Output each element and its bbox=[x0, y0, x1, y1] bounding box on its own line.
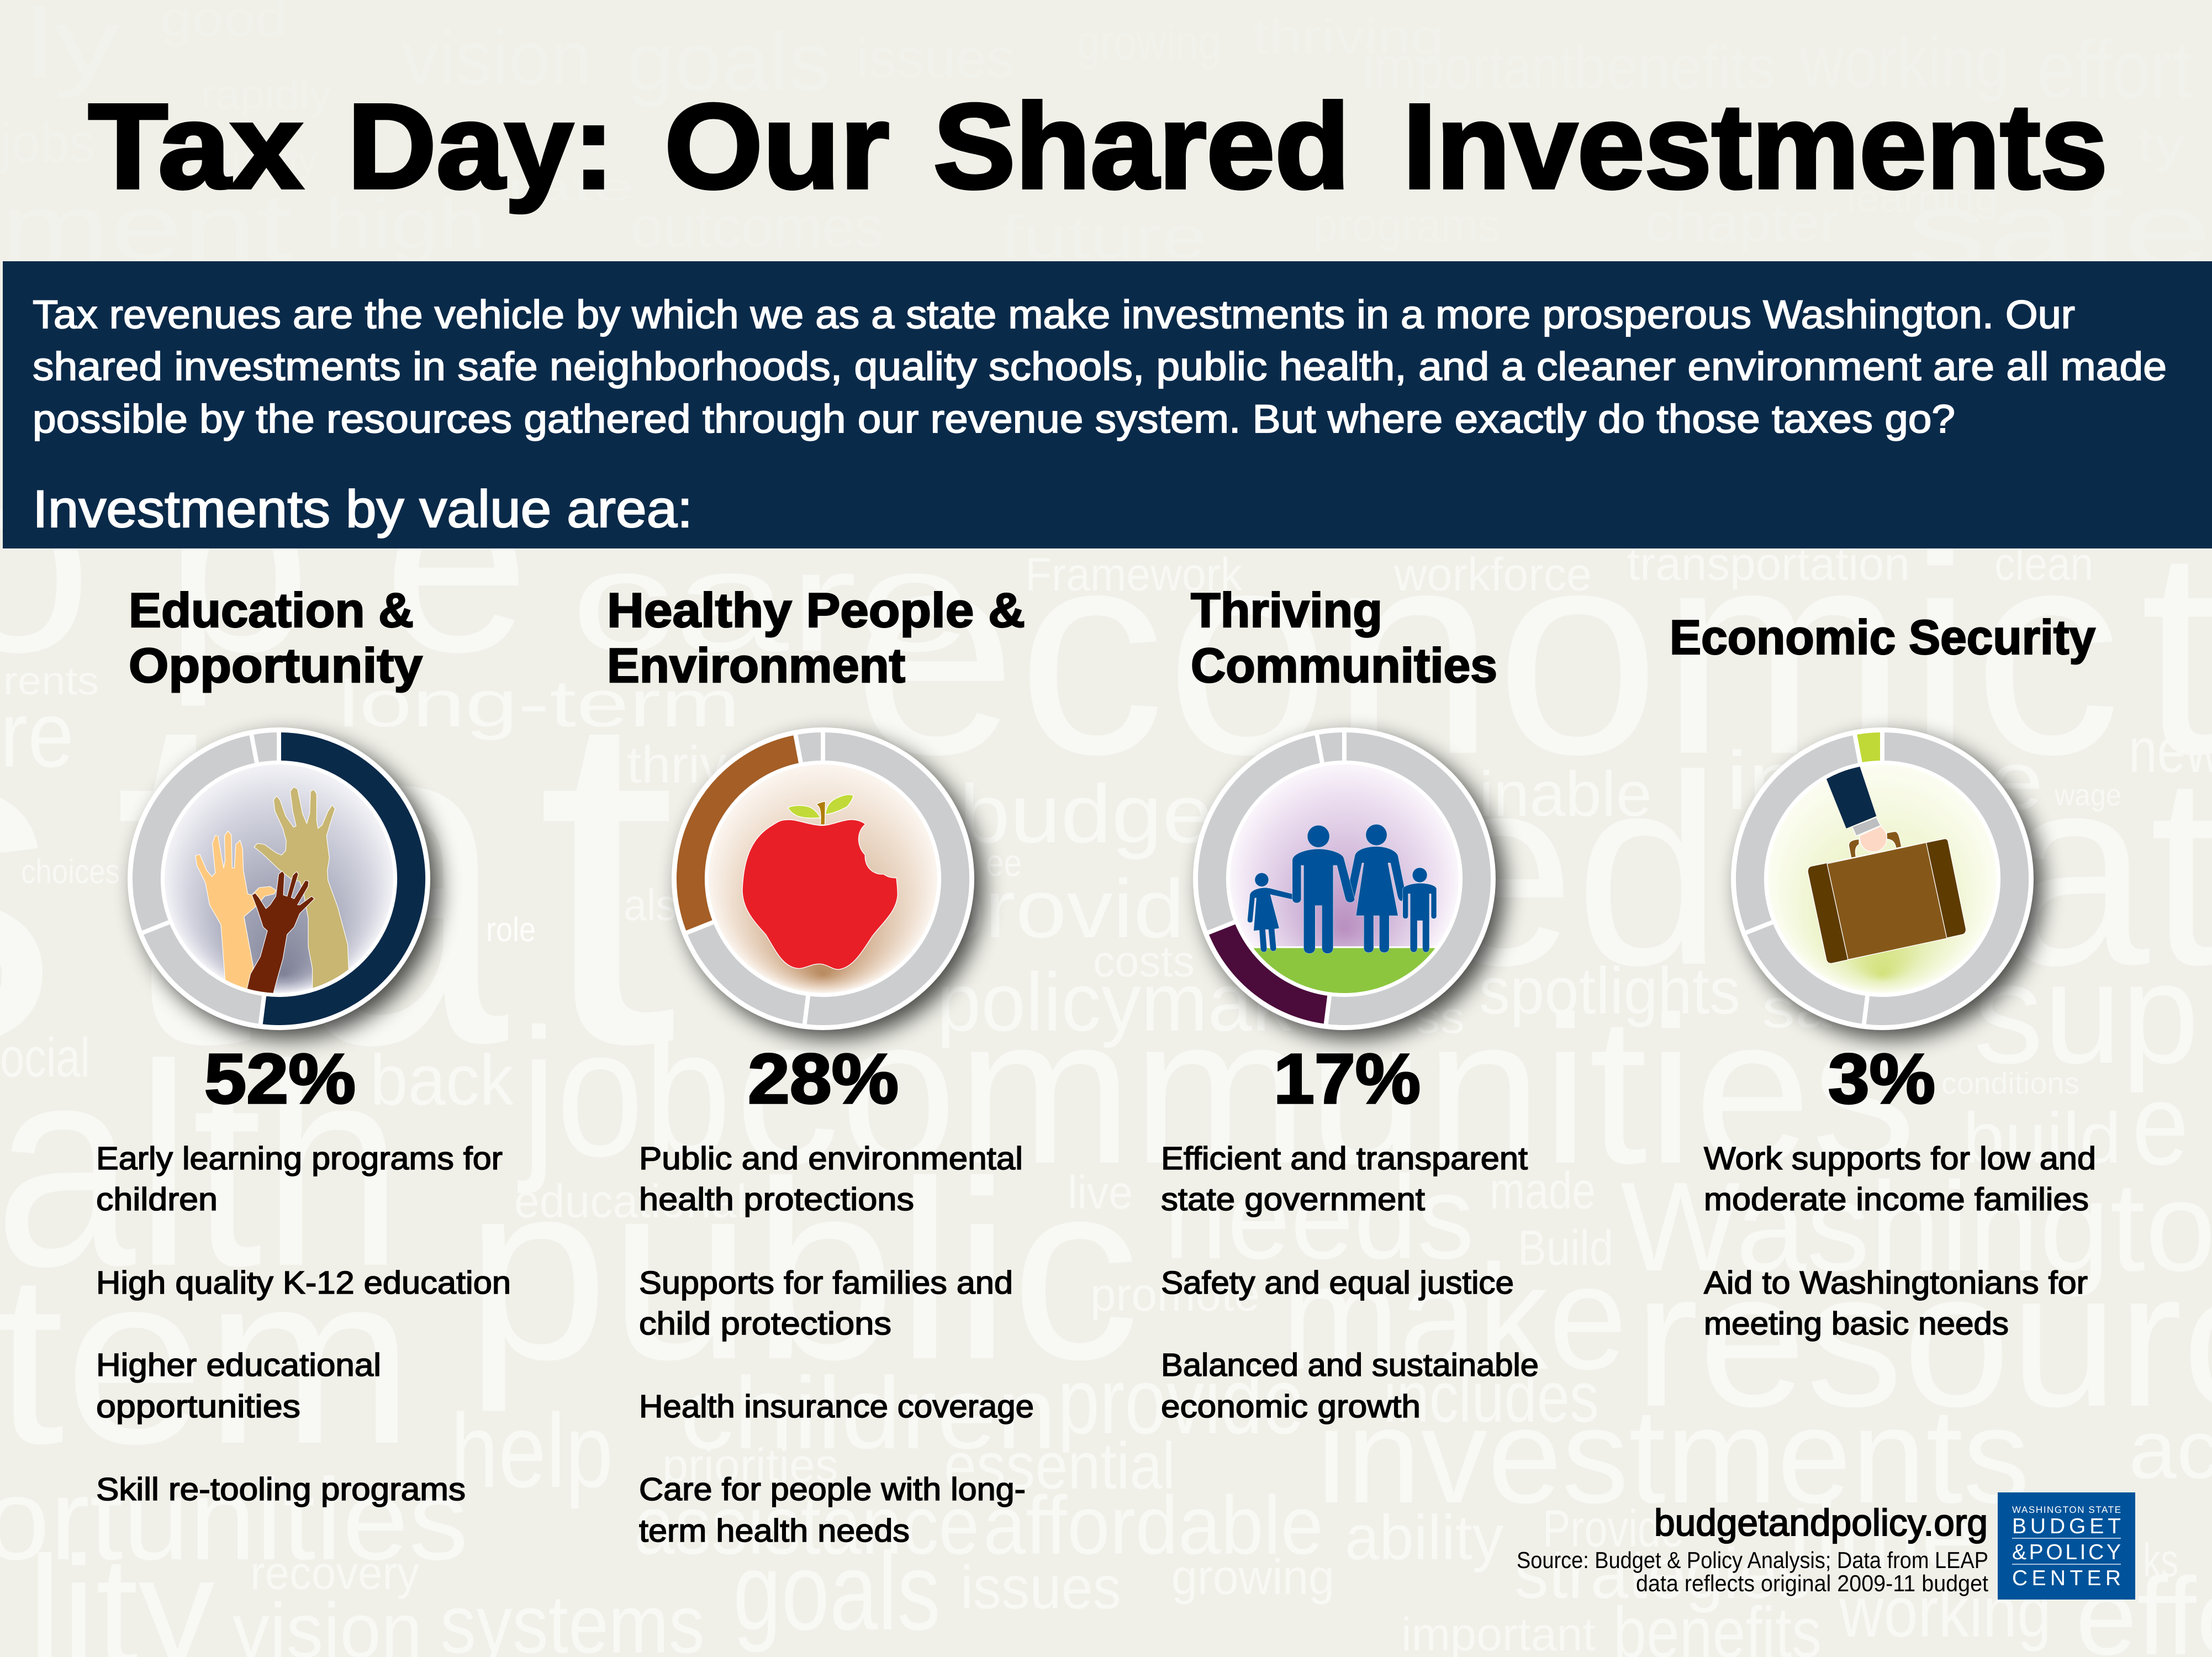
background word cloud lower: ability bbox=[1345, 1502, 1503, 1573]
heading: Economic Security bbox=[1670, 610, 2095, 664]
bullet list: High quality K-12 education bbox=[96, 1265, 511, 1301]
logo: Washington State Budget and Policy Center: &POLICY bbox=[2012, 1540, 2121, 1564]
background word cloud lower: provid bbox=[933, 862, 1185, 955]
background word cloud top: ty bbox=[2137, 118, 2185, 173]
background word cloud lower: t bbox=[113, 612, 256, 1143]
background word cloud lower: spotlights bbox=[1479, 954, 1740, 1028]
title: Tax bbox=[88, 80, 303, 214]
donut: 17 percent with family icon bbox=[1193, 727, 1504, 1039]
bullet list: Health insurance coverage bbox=[639, 1389, 1034, 1424]
background word cloud top: working bbox=[1799, 22, 2009, 102]
background word cloud lower: policymake bbox=[937, 956, 1337, 1048]
intro paragraph: shared investments in safe neighborhoods, quality schools, public health, and a cleaner environment are all made bbox=[33, 345, 2167, 389]
background word cloud lower: tem bbox=[0, 1223, 414, 1495]
background word cloud lower: issues bbox=[960, 1554, 1121, 1622]
icon: apple bbox=[742, 795, 898, 969]
logo: Washington State Budget and Policy Center: CENTER bbox=[2012, 1566, 2121, 1590]
panel: healthy people and environment bbox=[607, 583, 1034, 1549]
bullet list: Early learning programs for bbox=[96, 1141, 503, 1176]
background word cloud lower: educational bbox=[514, 1175, 747, 1228]
bullet list: Supports for families and bbox=[639, 1265, 1013, 1301]
bullet list: Safety and equal justice bbox=[1161, 1265, 1514, 1301]
background word cloud lower: priorities bbox=[662, 1439, 838, 1492]
background word cloud lower: inable bbox=[1479, 759, 1652, 830]
background word cloud top: future bbox=[1000, 203, 1207, 271]
background word cloud top: high bbox=[324, 183, 486, 264]
background word cloud lower: made bbox=[1490, 1162, 1596, 1220]
source note: data reflects original 2009-11 budget bbox=[1636, 1570, 1988, 1596]
donut: 28 percent with apple icon bbox=[672, 727, 983, 1039]
heading bbox=[1191, 583, 1497, 693]
background word cloud lower: affordable bbox=[983, 1479, 1323, 1571]
background word cloud lower: budge bbox=[959, 767, 1213, 860]
percentage: 28% bbox=[748, 1039, 899, 1118]
background word cloud lower: Provide bbox=[1543, 1500, 1684, 1558]
intro banner bbox=[3, 261, 2212, 548]
bullet list: economic growth bbox=[1161, 1389, 1421, 1424]
background word cloud top: issues bbox=[856, 28, 1015, 89]
background word cloud lower: time bbox=[1787, 1484, 1977, 1589]
background word cloud lower: sa bbox=[1762, 978, 1832, 1039]
bullet list: health protections bbox=[639, 1181, 914, 1217]
panel: economic security bbox=[1670, 610, 2096, 1342]
background word cloud lower: recovery bbox=[250, 1547, 419, 1600]
background word cloud lower: communities bbox=[735, 973, 1917, 1207]
background word cloud lower: build bbox=[1963, 1097, 2121, 1178]
background word cloud lower: transportation bbox=[1627, 538, 1910, 590]
background word cloud top: rapidly bbox=[200, 71, 332, 118]
panel: education and opportunity bbox=[96, 583, 511, 1507]
background word cloud top: thriving bbox=[1253, 9, 1444, 65]
background word cloud lower: long-term bbox=[338, 667, 740, 741]
background word cloud lower: wage bbox=[2054, 778, 2121, 812]
background word cloud lower: includes bbox=[1384, 1357, 1599, 1437]
intro paragraph: Tax revenues are the vehicle by which we as a state make investments in a more prosperous Washington. Our bbox=[33, 293, 2075, 337]
background word cloud lower: ks bbox=[2143, 1534, 2178, 1587]
background word cloud top: jobs bbox=[0, 112, 95, 174]
background word cloud lower: role bbox=[486, 911, 536, 949]
bullet list bbox=[639, 1141, 1034, 1549]
background word cloud lower: growing bbox=[1171, 1550, 1334, 1605]
heading bbox=[607, 583, 1025, 693]
website link: budgetandpolicy.org bbox=[1654, 1502, 1988, 1544]
background word cloud top bbox=[0, 0, 2212, 288]
bullet list bbox=[96, 1141, 511, 1507]
bullet list: meeting basic needs bbox=[1704, 1306, 2009, 1342]
background word cloud lower: job bbox=[516, 990, 731, 1195]
title bbox=[88, 80, 2108, 214]
percentage: 52% bbox=[204, 1039, 356, 1118]
background word cloud lower: essential bbox=[944, 1429, 1175, 1503]
title: Day: bbox=[347, 80, 614, 214]
background word cloud top: important bbox=[1363, 34, 1574, 102]
heading: Environment bbox=[607, 638, 905, 693]
bullet list: Balanced and sustainable bbox=[1161, 1347, 1539, 1383]
background word cloud top: outcomes bbox=[631, 195, 884, 260]
background word cloud top: growing bbox=[1077, 15, 1221, 70]
background word cloud lower: investments bbox=[1317, 1380, 2030, 1531]
bullet list: children bbox=[96, 1181, 218, 1217]
background word cloud lower: sup bbox=[1973, 933, 2199, 1094]
heading: Healthy People & bbox=[607, 583, 1025, 637]
logo: Washington State Budget and Policy Center: BUDGET bbox=[2012, 1514, 2121, 1538]
background word cloud lower: working bbox=[1839, 1571, 2051, 1652]
background word cloud top: benefits bbox=[1574, 34, 1776, 102]
background word cloud lower: a bbox=[293, 612, 510, 1143]
background word cloud lower: ocial bbox=[0, 1027, 90, 1089]
background word cloud lower: promote bbox=[1090, 1269, 1260, 1321]
background word cloud lower: public bbox=[465, 1129, 1140, 1414]
background word cloud lower: rents bbox=[3, 659, 99, 703]
bullet list: Work supports for low and bbox=[1704, 1141, 2096, 1176]
background word cloud lower: thriv bbox=[627, 736, 726, 794]
logo: Washington State Budget and Policy Center bbox=[1998, 1492, 2135, 1600]
background word cloud lower: ee bbox=[986, 841, 1022, 884]
background word cloud lower: income bbox=[1726, 734, 2044, 827]
heading: Communities bbox=[1191, 638, 1497, 693]
background word cloud lower: conditions bbox=[1941, 1066, 2079, 1100]
percentage: 3% bbox=[1828, 1039, 1935, 1118]
background word cloud lower: choices bbox=[21, 853, 120, 891]
background word cloud top: learning bbox=[1846, 177, 1998, 220]
icon: hand carrying suitcase bbox=[1808, 750, 1966, 963]
bullet list: Aid to Washingtonians for bbox=[1704, 1265, 2088, 1301]
bullet list: state government bbox=[1161, 1181, 1425, 1217]
background word cloud lower: Framework bbox=[1025, 548, 1242, 601]
donut: 52 percent with hands icon bbox=[128, 727, 439, 1039]
background word cloud top: rate bbox=[507, 166, 634, 209]
bullet list: Public and environmental bbox=[639, 1141, 1023, 1176]
bullet list: Higher educational bbox=[96, 1347, 381, 1383]
percentage: 17% bbox=[1274, 1039, 1421, 1118]
background word cloud lower: make bbox=[1281, 1234, 1627, 1401]
background word cloud lower: goals bbox=[733, 1530, 941, 1653]
background word cloud top: safe bbox=[1906, 171, 2212, 288]
background word cloud lower: children bbox=[680, 1357, 1057, 1470]
background word cloud lower: economic bbox=[852, 488, 2121, 815]
background word cloud lower: alth bbox=[0, 1005, 403, 1326]
source note bbox=[1517, 1547, 1988, 1596]
title: Shared bbox=[933, 80, 1350, 214]
background word cloud top: programs bbox=[1313, 199, 1500, 252]
background word cloud lower: ss bbox=[1416, 993, 1465, 1042]
bullet list: child protections bbox=[639, 1306, 891, 1342]
bullet list bbox=[1704, 1141, 2096, 1342]
heading: Thriving bbox=[1191, 583, 1382, 637]
background word cloud lower: costs bbox=[1093, 937, 1195, 986]
bullet list: moderate income families bbox=[1704, 1181, 2089, 1217]
source note: Source: Budget & Policy Analysis; Data from LEAP bbox=[1517, 1547, 1988, 1573]
subheading: Investments by value area: bbox=[33, 480, 693, 539]
background word cloud lower: needs bbox=[1164, 1151, 1474, 1284]
background word cloud lower: workforce bbox=[1393, 548, 1592, 601]
background word cloud lower: help bbox=[451, 1392, 613, 1510]
bullet list: term health needs bbox=[639, 1513, 910, 1549]
background word cloud lower: als bbox=[624, 880, 677, 930]
background word cloud lower: t bbox=[536, 612, 679, 1143]
background word cloud lower: re bbox=[0, 682, 74, 787]
background word cloud lower: care bbox=[571, 521, 972, 682]
background word cloud top: quality bbox=[212, 140, 318, 180]
bullet list: opportunities bbox=[96, 1389, 300, 1424]
bullet list: Care for people with long- bbox=[639, 1471, 1026, 1507]
heading: Opportunity bbox=[129, 638, 423, 693]
heading bbox=[129, 583, 423, 693]
panel: thriving communities bbox=[1161, 583, 1539, 1424]
bullet list bbox=[1161, 1141, 1539, 1424]
icon: family on grass bbox=[1247, 824, 1437, 993]
background word cloud lower bbox=[0, 410, 2212, 1657]
background word cloud top: ment bbox=[0, 175, 293, 280]
background word cloud lower: strategies bbox=[1514, 1533, 1811, 1613]
donut: 3 percent with suitcase icon bbox=[1731, 727, 2042, 1039]
background word cloud lower: assistance bbox=[634, 1479, 979, 1571]
title: Investments bbox=[1403, 80, 2108, 214]
background word cloud lower: back bbox=[370, 1039, 514, 1120]
bullet list: Skill re-tooling programs bbox=[96, 1471, 466, 1507]
background word cloud top: vision bbox=[402, 14, 592, 101]
background word cloud lower: e bbox=[2132, 1059, 2189, 1189]
title: Our bbox=[664, 80, 889, 214]
intro paragraph bbox=[33, 293, 2167, 441]
background word cloud lower: live bbox=[1068, 1167, 1133, 1219]
background word cloud top: chapter bbox=[1645, 192, 1839, 254]
background word cloud top: goals bbox=[627, 15, 831, 108]
heading: Education & bbox=[129, 583, 414, 637]
background word cloud lower: provide bbox=[1058, 1349, 1305, 1454]
icon: raised hands bbox=[196, 787, 349, 993]
background word cloud lower: clean bbox=[1994, 538, 2093, 590]
logo: Washington State Budget and Policy Center: WASHINGTON STATE bbox=[2012, 1505, 2121, 1515]
background word cloud lower: Build bbox=[1518, 1221, 1613, 1276]
bullet list: Efficient and transparent bbox=[1161, 1141, 1528, 1176]
intro paragraph: possible by the resources gathered through our revenue system. But where exactly do those taxes go? bbox=[33, 397, 1955, 441]
